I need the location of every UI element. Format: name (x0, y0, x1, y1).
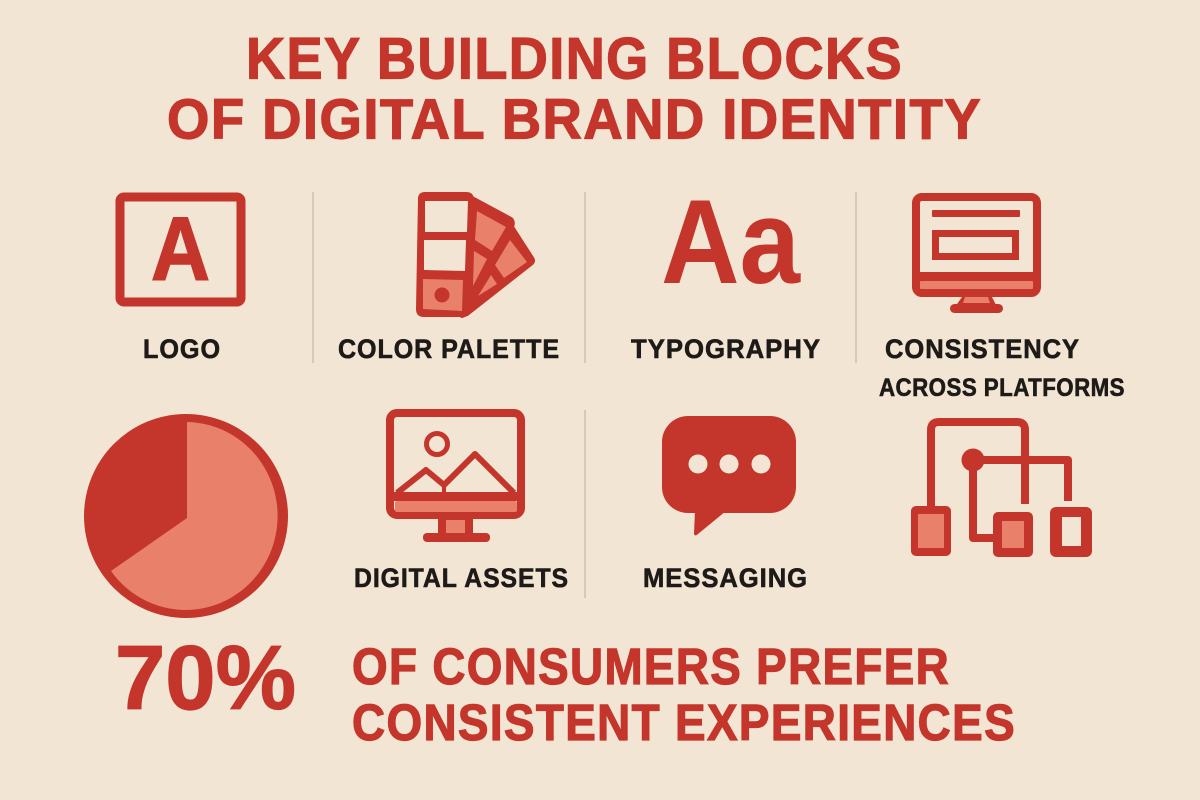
panel: typography (631, 175, 821, 364)
icon: speech bubble (662, 416, 796, 536)
label: typography: TYPOGRAPHY (631, 334, 821, 364)
statistic caption: CONSISTENT EXPERIENCES (352, 694, 1016, 751)
icon: logo (120, 197, 241, 302)
title (167, 26, 982, 152)
label: logo: LOGO (143, 334, 221, 364)
icon: monitor layout (916, 197, 1037, 313)
icon: color swatch fan (416, 192, 533, 317)
statistic caption: OF CONSUMERS PREFER (352, 638, 950, 695)
panel: consistency across platforms (879, 197, 1125, 557)
icon: monitor with image (390, 413, 521, 542)
icon: logo: A (151, 200, 210, 300)
panel: color palette (338, 192, 560, 364)
panel: logo (120, 197, 241, 364)
label: across platforms: ACROSS PLATFORMS (879, 374, 1125, 402)
statistic caption (352, 638, 1016, 751)
label: messaging: MESSAGING (643, 563, 808, 593)
label: digital assets: DIGITAL ASSETS (354, 563, 569, 593)
icon: typography: Aa (661, 175, 801, 309)
title: OF DIGITAL BRAND IDENTITY (167, 88, 982, 152)
panel: messaging (643, 416, 808, 593)
chart: 70 percent pie (84, 414, 288, 618)
label: color palette: COLOR PALETTE (338, 334, 560, 364)
statistic: 70%: 70% (115, 628, 296, 729)
icon: connected devices diagram (911, 422, 1092, 557)
title: KEY BUILDING BLOCKS (246, 26, 903, 92)
label: consistency: CONSISTENCY (885, 334, 1080, 364)
panel: digital assets (354, 413, 569, 593)
